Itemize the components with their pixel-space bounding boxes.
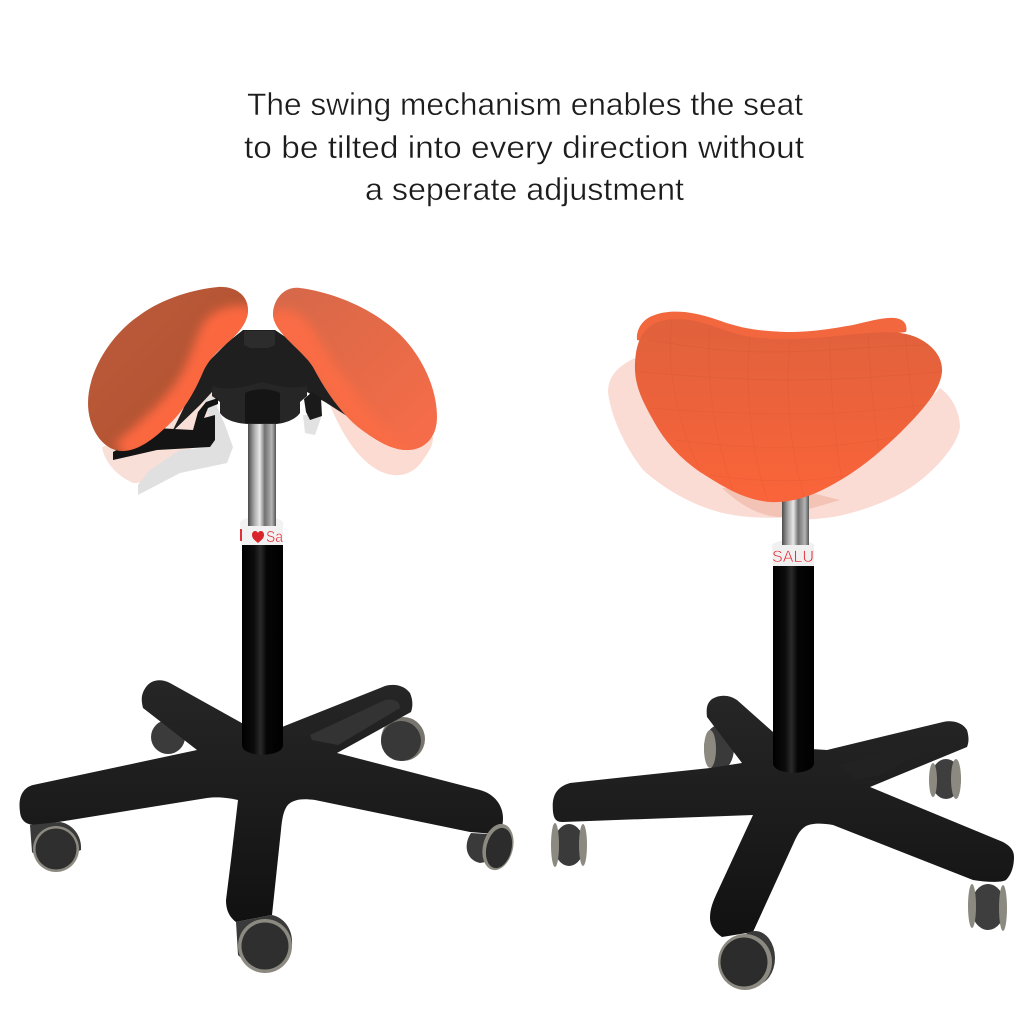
heading text: The swing mechanism enables the seat: [247, 86, 803, 122]
right stool: saddle seat seen from behind: [551, 312, 1014, 990]
base arms: [553, 696, 1014, 937]
right caster: [968, 884, 1007, 931]
ghost: previous tilt position of the left seat and lever: [102, 390, 433, 495]
raised arm panel highlight: [310, 699, 400, 745]
heading text: a seperate adjustment: [365, 171, 684, 207]
brand collar: SALU: [772, 547, 814, 566]
brand collar: [240, 516, 283, 546]
rear casters: [704, 725, 961, 799]
five-star base: [20, 680, 518, 973]
ghost: previous tilt positions of the seat: [608, 358, 960, 519]
seat back rim: [637, 312, 907, 345]
chrome gas lift pole: [782, 495, 809, 545]
left caster: [551, 823, 587, 867]
adjustment lever: [113, 398, 218, 460]
seat mechanism and hub: [172, 330, 350, 432]
heading text: [244, 86, 804, 207]
right seat pad: [270, 288, 437, 460]
chrome gas lift pole: [248, 420, 276, 520]
left caster: [30, 822, 81, 872]
raised arm panel highlight: [840, 735, 955, 780]
black column: [242, 544, 283, 755]
five-star base: [551, 696, 1014, 990]
heading text: to be tilted into every direction without: [244, 129, 804, 165]
black column: [773, 566, 814, 773]
front caster: [236, 915, 292, 973]
brand collar: [772, 536, 814, 566]
base arms: [20, 680, 503, 922]
seat: [635, 318, 942, 502]
right caster: [467, 821, 518, 873]
brand collar: Sa: [266, 529, 283, 546]
rear casters: [151, 717, 425, 761]
front caster: [718, 931, 775, 990]
left seat pad: [88, 287, 255, 460]
left stool: saddle seat split and tilted sideways: [20, 287, 518, 973]
